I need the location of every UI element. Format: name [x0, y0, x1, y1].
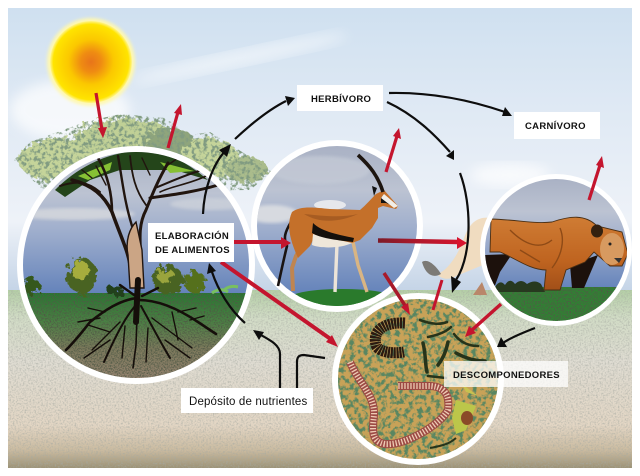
label: elaboración de alimentos: DE ALIMENTOS	[155, 245, 230, 256]
black arrows: nutrient flow	[203, 93, 535, 388]
white belly	[312, 234, 352, 247]
face markings	[381, 197, 396, 207]
gazelle	[278, 155, 398, 292]
seed	[452, 400, 476, 434]
label: herbívoro	[297, 85, 383, 111]
tree crown leaves	[55, 151, 208, 197]
front legs	[335, 244, 337, 292]
hind leg	[292, 240, 305, 291]
panel: gazelle circle	[246, 140, 423, 316]
shrubs	[23, 258, 206, 295]
label: depósito de nutrientes: Depósito de nutrientes	[189, 396, 307, 408]
icon: sun	[47, 18, 135, 106]
arrow: carcass to decomposers	[433, 280, 442, 310]
background: ground	[8, 290, 632, 468]
arrow: deposit to tree	[253, 330, 280, 388]
label: elaboración de alimentos: ELABORACIÓN	[155, 230, 229, 242]
arrow: gazelle to lion	[378, 237, 467, 249]
roots	[66, 280, 216, 368]
arrow: lion to decomposers	[497, 328, 535, 347]
millipede	[375, 323, 405, 353]
label: depósito de nutrientes	[181, 388, 313, 413]
label: descomponedores: DESCOMPONEDORES	[453, 370, 560, 381]
arrow: food to decomposers	[221, 262, 338, 347]
horns	[358, 155, 383, 192]
panel: tree circle	[15, 146, 255, 385]
arrow: herbivore to carnivore	[389, 93, 512, 116]
arrow: herbivore to decomposers	[451, 173, 469, 293]
arrow: food to gazelle	[234, 237, 291, 249]
label: carnívoro: CARNÍVORO	[525, 121, 586, 132]
arrow: gazelle heat	[386, 128, 401, 172]
arrow: lion to decomposers	[465, 304, 501, 337]
panel: decomposers circle	[332, 293, 504, 465]
label: descomponedores	[444, 361, 568, 387]
red arrows: energy flow	[96, 93, 604, 347]
tail and far hind leg	[278, 222, 291, 286]
label: carnívoro	[514, 112, 600, 139]
arrow: lion heat	[589, 156, 604, 200]
body	[289, 190, 398, 258]
arrow: herbivore down	[387, 102, 454, 160]
label: herbívoro: HERBÍVORO	[311, 94, 371, 105]
earthworm	[350, 362, 448, 444]
arrow: sun to canopy	[96, 93, 107, 138]
arrow: food to tree top	[203, 144, 231, 214]
background: sky	[8, 8, 632, 293]
tree trunk and branches	[60, 156, 218, 270]
arrow: decomposers to deposit	[297, 355, 325, 388]
tail of lion outside circle	[422, 218, 492, 295]
arrow: tree heat	[168, 104, 182, 148]
arrow: tree to food	[207, 263, 245, 323]
body	[490, 217, 628, 290]
larvae	[420, 320, 485, 378]
arrow: gazelle to decomposers	[384, 273, 410, 315]
label: elaboración de alimentos	[148, 223, 234, 262]
tree canopy	[14, 114, 271, 190]
far legs	[485, 254, 510, 286]
panel: lion circle	[480, 174, 632, 327]
arrow: to herbivore	[235, 96, 295, 139]
black flank stripe	[312, 223, 354, 242]
